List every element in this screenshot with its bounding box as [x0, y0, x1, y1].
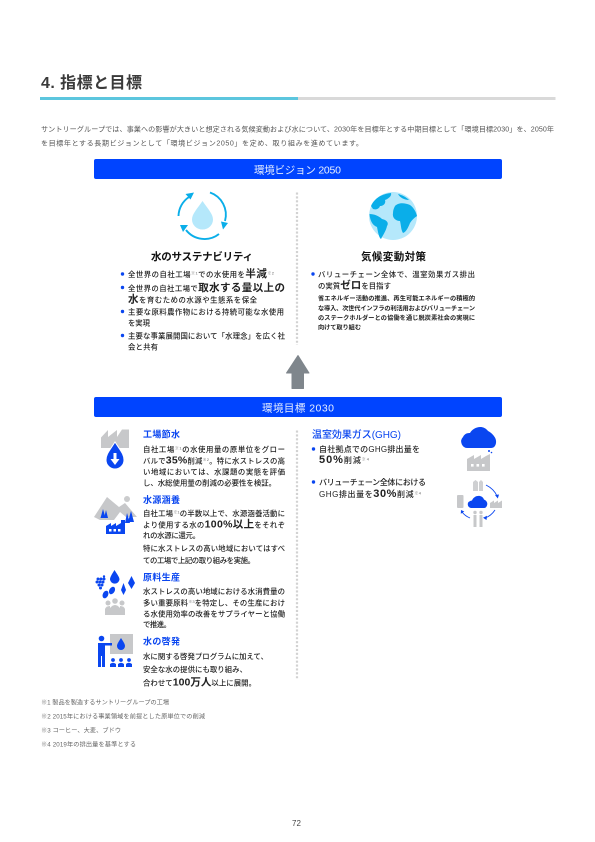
climate action text: のステークホルダーとの協働を通じ脱炭素社会の実現に [318, 314, 475, 322]
section: water source conservation: 自社工場 [143, 509, 173, 518]
divider: targets [296, 430, 298, 680]
section: water education: 安全な水の提供にも取り組み、 [143, 665, 247, 674]
climate action text: 省エネルギー活動の推進、再生可能エネルギーの積極的 [318, 294, 475, 302]
banner: target 2030: 環境目標 2030 [262, 402, 334, 414]
climate action text: 向けて取り組む [318, 324, 361, 332]
title rule [40, 97, 556, 100]
climate action text [311, 270, 475, 332]
water sustainability bullets: 全世界の自社工場 [128, 270, 191, 279]
banner: vision 2050: 環境ビジョン 2050 [254, 164, 341, 176]
section: greenhouse gases: 自社拠点でのGHG排出量を [319, 444, 420, 454]
arrow: up [286, 356, 309, 388]
section: water source conservation: の半数以上で、水源涵養活動に [180, 509, 285, 518]
section: raw material production: 水ストレスの高い地域における水消費量の [143, 587, 285, 596]
heading: climate action: 気候変動対策 [361, 250, 426, 263]
icon: raw materials [96, 570, 135, 615]
section: water saving: 。特に水ストレスの高 [209, 456, 285, 466]
water sustainability bullets: 主要な事業展開国において「水理念」を広く社 [128, 332, 286, 340]
section: greenhouse gases: ※4 [414, 490, 422, 496]
water sustainability bullets: 水を育むための水源や生態系を保全 [128, 292, 258, 306]
water sustainability bullets: ※1 [191, 270, 198, 276]
section: water saving: し、水総使用量の削減の必要性を検証。 [143, 478, 276, 488]
water sustainability bullets [121, 267, 286, 352]
water sustainability bullets: での水使用を [198, 270, 245, 279]
section: water saving: の水使用量の原単位をグロー [182, 445, 285, 454]
section: water saving: ※2 [203, 457, 210, 462]
section: water saving: ※1 [175, 446, 182, 450]
footnotes [41, 698, 206, 748]
icon: globe [369, 192, 417, 240]
section: greenhouse gases [312, 428, 426, 500]
intro text [41, 124, 554, 148]
icon: cloud over factory [461, 427, 496, 471]
section: greenhouse gases: バリューチェーン全体における [319, 477, 426, 487]
section: water saving: 工場節水 [143, 428, 180, 440]
water sustainability bullets: ※2 [267, 270, 275, 276]
title: 4. 指標と目標 [41, 73, 142, 92]
section: water saving: 自社工場 [143, 445, 174, 454]
section: greenhouse gases: ※4 [362, 456, 370, 462]
section: water saving: バルで35%削減 [143, 454, 202, 466]
section: water education [143, 636, 268, 688]
section: raw material production: ※3 [188, 599, 195, 604]
icon: education [98, 634, 133, 667]
icon: value chain cycle [457, 480, 502, 527]
section: water source conservation [143, 494, 286, 565]
water sustainability bullets: を実現 [128, 318, 151, 328]
section: water source conservation: 特に水ストレスの高い地域においてはすべ [143, 544, 286, 553]
footnotes: ※1 製品を製造するサントリーグループの工場 [41, 698, 169, 706]
section: water source conservation: より使用する水の100%以上をそれぞ [143, 518, 285, 530]
intro text: サントリーグループでは、事業への影響が大きいと想定される気候変動および水について、2030年を目標年とする中期目標として「環境目標2030」を、2050年 [41, 124, 554, 134]
section: raw material production [143, 572, 286, 629]
section: water source conservation: 水源涵養 [143, 494, 180, 505]
section: water saving [143, 428, 286, 488]
water sustainability bullets: 半減 [245, 267, 267, 280]
climate action text: の実質ゼロを目指す [318, 278, 391, 292]
banner: target 2030 [94, 397, 502, 417]
heading: water sustainability: 水のサステナビリティ [151, 250, 253, 263]
section: water source conservation: ※1 [173, 510, 180, 514]
water sustainability bullets: 会と共有 [128, 342, 158, 352]
section: water source conservation: れの水源に還元。 [143, 531, 200, 540]
divider: vision [296, 192, 298, 345]
section: raw material production: 多い重要原料 [143, 598, 188, 608]
section: greenhouse gases: GHG排出量を30%削減 [319, 488, 414, 500]
page number: 72 [292, 819, 301, 828]
water sustainability bullets: 全世界の自社工場で取水する量以上の [128, 281, 285, 294]
section: greenhouse gases: 温室効果ガス(GHG) [312, 428, 401, 441]
section: water education: 合わせて100万人以上に展開。 [143, 676, 256, 688]
footnotes: ※2 2015年における事業領域を前提とした原単位での削減 [41, 712, 206, 720]
section: water education: 水に関する啓発プログラムに加えて、 [143, 652, 268, 661]
section: raw material production: る水使用効率の改善をサプライヤーと協働 [143, 610, 286, 618]
section: raw material production: で推進。 [143, 620, 171, 629]
section: raw material production: を特定し、その生産におけ [195, 598, 285, 608]
icon: watershed [94, 496, 137, 534]
section: water saving: い地域においては、水課題の実態を評価 [143, 468, 286, 476]
climate action text: な導入、次世代インフラの利活用およびバリューチェーン [318, 304, 475, 312]
section: water education: 水の啓発 [143, 636, 180, 646]
footnotes: ※4 2019年の排出量を基準とする [41, 740, 136, 748]
section: greenhouse gases: 50%削減 [319, 454, 361, 466]
icon: water cycle [178, 192, 228, 239]
section: raw material production: 原料生産 [143, 572, 180, 582]
water sustainability bullets: 主要な原料農作物における持続可能な水使用 [128, 308, 284, 316]
section: water source conservation: ての工場で上記の取り組みを実施。 [143, 556, 255, 565]
intro text: を目標年とする長期ビジョンとして「環境ビジョン2050」を定め、取り組みを進めています。 [41, 138, 363, 148]
climate action text: バリューチェーン全体で、温室効果ガス排出 [318, 270, 475, 279]
banner: vision 2050 [94, 159, 502, 179]
footnotes: ※3 コーヒー、大麦、ブドウ [41, 726, 121, 734]
icon: factory with water drop [101, 430, 129, 469]
